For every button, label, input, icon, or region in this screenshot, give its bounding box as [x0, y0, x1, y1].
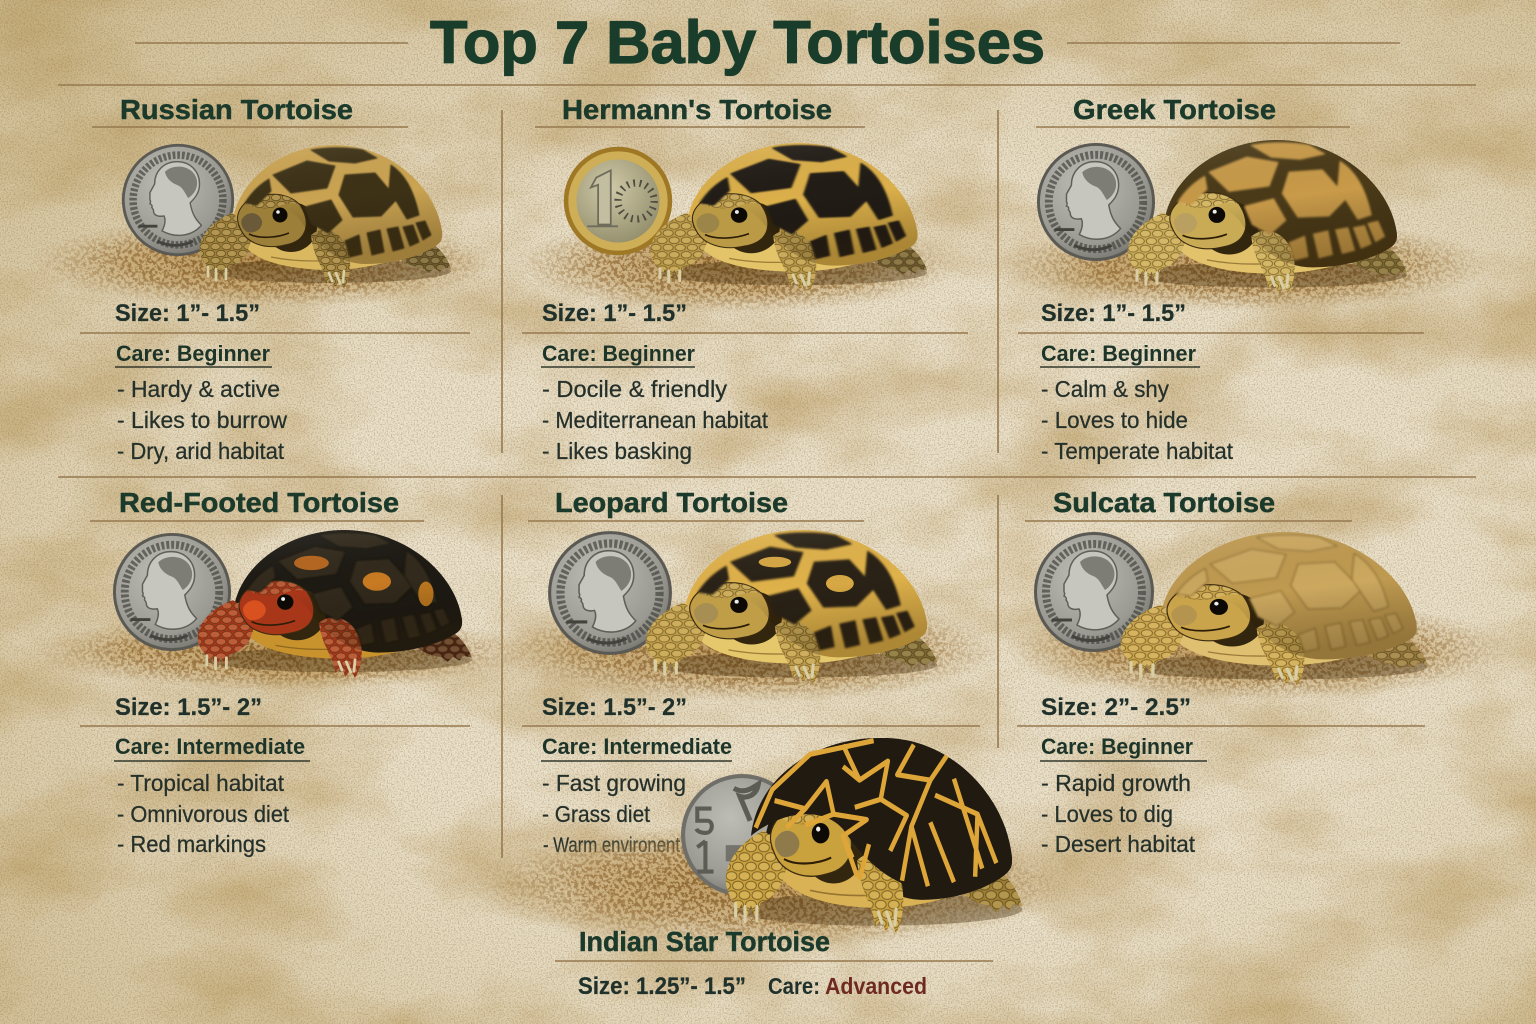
traits list: - Omnivorous diet — [117, 801, 290, 827]
care level — [768, 973, 927, 999]
illustration: Indian star tortoise — [726, 738, 1022, 934]
traits list: - Loves to hide — [1041, 407, 1188, 433]
size: Size: 1.5”- 2” — [115, 694, 262, 721]
panel: Sulcata Tortoise — [1005, 487, 1515, 857]
heading: Red-Footed Tortoise: Red-Footed Tortoise — [119, 487, 399, 518]
illustration: Sulcata tortoise — [1121, 532, 1427, 686]
size: Size: 1.25”- 1.5” — [578, 973, 746, 1000]
icon: rupee coin — [681, 774, 803, 896]
care level: Care: Intermediate — [542, 734, 732, 759]
icon: quarter coin — [1034, 532, 1154, 652]
traits list — [1041, 770, 1196, 857]
illustration: Leopard tortoise — [646, 530, 937, 684]
traits list: - Dry, arid habitat — [117, 438, 285, 464]
illustration: Red-footed tortoise — [198, 530, 472, 678]
heading: Hermann's Tortoise: Hermann's Tortoise — [562, 94, 832, 125]
size: Size: 1.5”- 2” — [542, 694, 687, 721]
heading: Sulcata Tortoise: Sulcata Tortoise — [1053, 487, 1275, 518]
care level: Care: — [768, 973, 820, 999]
traits list: - Red markings — [117, 831, 266, 857]
panel: Hermann's Tortoise — [510, 94, 968, 464]
traits list — [117, 376, 287, 464]
title: Top 7 Baby Tortoises — [430, 9, 1045, 76]
heading: Russian Tortoise: Russian Tortoise — [120, 94, 353, 125]
traits list: - Grass diet — [542, 801, 651, 827]
icon: quarter coin — [1037, 143, 1155, 261]
traits list: - Loves to dig — [1041, 801, 1173, 827]
traits list: - Docile & friendly — [542, 376, 728, 402]
care level: Care: Beginner — [1041, 341, 1196, 366]
traits list: - Likes to burrow — [117, 407, 287, 433]
traits list: - Desert habitat — [1041, 831, 1196, 857]
panel: Red-Footed Tortoise — [35, 487, 525, 857]
traits list: - Rapid growth — [1041, 770, 1191, 796]
size: Size: 1”- 1.5” — [542, 300, 687, 327]
traits list: - Hardy & active — [117, 376, 280, 402]
illustration: Greek tortoise — [1128, 140, 1407, 294]
panel: Indian Star Tortoise — [470, 738, 1070, 1000]
traits list: - Mediterranean habitat — [542, 407, 769, 433]
heading: Indian Star Tortoise: Indian Star Tortoise — [579, 926, 830, 957]
traits list: - Fast growing — [542, 770, 686, 796]
care level: Care: Beginner — [1041, 734, 1193, 759]
heading: Leopard Tortoise: Leopard Tortoise — [555, 487, 788, 518]
panel: Russian Tortoise — [30, 94, 500, 464]
traits list — [542, 770, 686, 857]
traits list: - Calm & shy — [1041, 376, 1169, 402]
size: Size: 1”- 1.5” — [115, 300, 260, 327]
icon: quarter coin — [548, 531, 672, 655]
illustration: Hermann's tortoise — [651, 143, 927, 291]
icon: quarter coin — [122, 144, 234, 256]
size: Size: 1”- 1.5” — [1041, 300, 1186, 327]
care level: Care: Intermediate — [115, 734, 305, 759]
heading: Greek Tortoise: Greek Tortoise — [1073, 94, 1276, 125]
panel: Greek Tortoise — [995, 94, 1495, 464]
care level: Advanced — [825, 973, 927, 999]
size: Size: 2”- 2.5” — [1041, 694, 1191, 721]
care level: Care: Beginner — [542, 341, 695, 366]
traits list: - Temperate habitat — [1041, 438, 1234, 464]
panel: Leopard Tortoise — [495, 487, 1005, 857]
care level: Care: Beginner — [116, 341, 270, 366]
traits list: - Likes basking — [542, 438, 692, 464]
traits list — [117, 770, 290, 857]
icon: euro coin — [564, 147, 672, 255]
illustration: Russian tortoise — [200, 145, 451, 289]
traits list — [1041, 376, 1234, 464]
traits list: - Warm environent — [543, 834, 680, 857]
traits list: - Tropical habitat — [117, 770, 285, 796]
traits list — [542, 376, 769, 464]
icon: quarter coin — [113, 533, 231, 651]
